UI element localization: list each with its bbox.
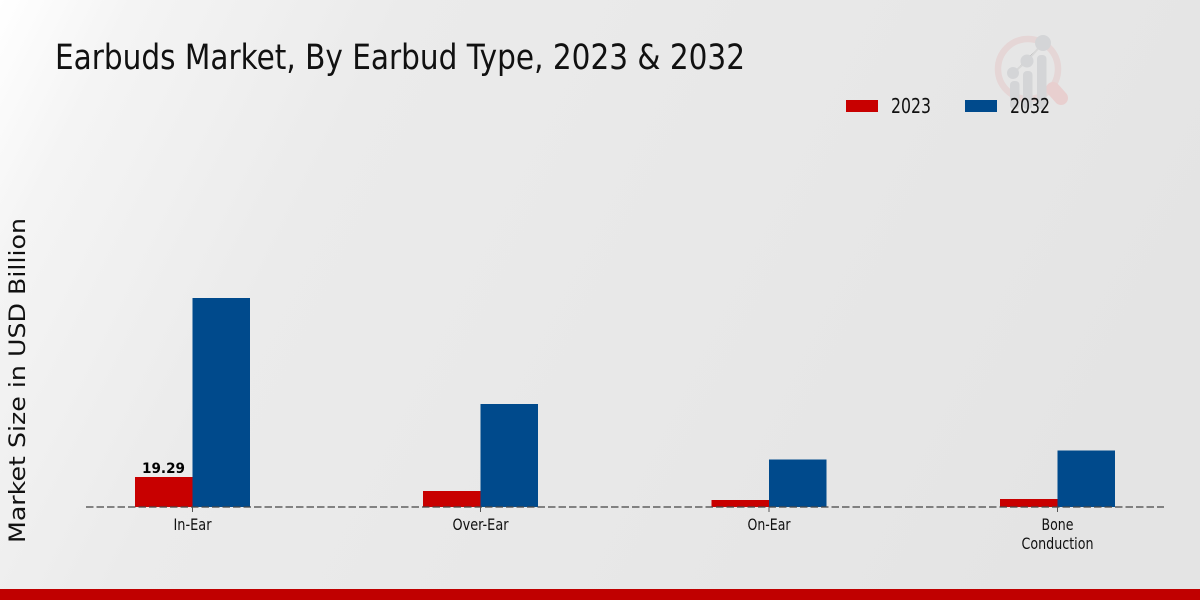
y-axis label: Market Size in USD Billion (5, 218, 31, 543)
bar chart (86, 298, 1164, 512)
legend item: 2032 (965, 94, 1050, 118)
x-axis label: Bone Conduction: Bone (1042, 515, 1074, 534)
data label: 19.29: 19.29 (142, 461, 185, 477)
footer bar (0, 589, 1200, 600)
legend item: 2023 (846, 94, 931, 118)
x-axis label: Bone Conduction (1022, 515, 1094, 553)
group: On-Ear (712, 460, 826, 507)
title: Earbuds Market, By Earbud Type, 2023 & 2032 (55, 38, 745, 78)
icon: watermark logo (998, 35, 1061, 109)
legend (846, 94, 1050, 118)
group: Over-Ear (423, 404, 538, 507)
group: In-Ear (135, 298, 250, 507)
x-axis label: Bone Conduction: Conduction (1022, 534, 1094, 553)
legend item: 2032: 2032 (1010, 94, 1050, 118)
group: Bone Conduction (1000, 450, 1115, 507)
x-axis label: On-Ear: On-Ear (748, 515, 791, 534)
x-axis label: Over-Ear: Over-Ear (452, 515, 509, 534)
legend item: 2023: 2023 (891, 94, 931, 118)
x-axis label: In-Ear: In-Ear (174, 515, 212, 534)
